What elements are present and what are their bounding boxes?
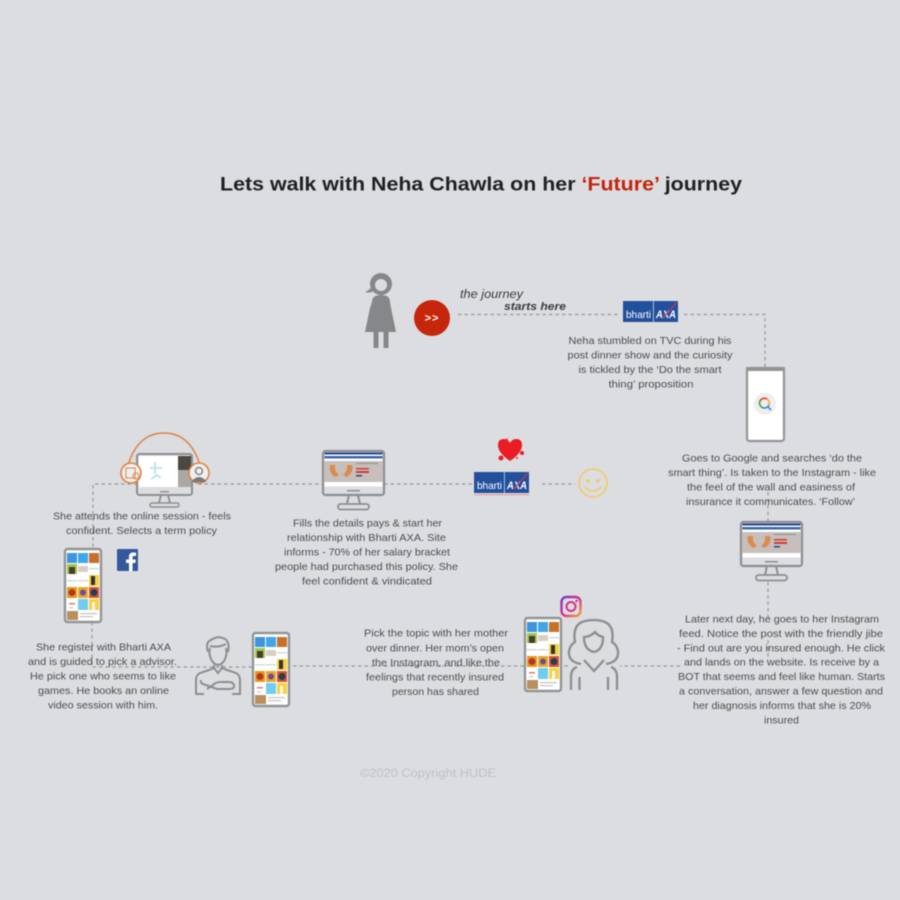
text: Pick the topic: feelings that recently insured [366, 672, 504, 684]
icon: Facebook logo [117, 549, 138, 571]
text: She register: and is guided to pick a advisor. [28, 657, 177, 668]
icon: phone with Instagram feed [525, 618, 561, 691]
text: Fills the details: Fills the details pays & start her [293, 518, 443, 530]
label: the journey starts here: the journey [460, 289, 524, 301]
text: Fills the details: feel confident & vindicated [302, 576, 432, 588]
text: Fills the details: people had purchased this policy. She [275, 562, 458, 573]
text: Goes to Google [668, 454, 876, 508]
text: Neha stumbled on TVC: Neha stumbled on TVC during his [568, 336, 732, 347]
text: Later next day: insured [764, 716, 799, 726]
text: She attends: confident. Selects a term policy [66, 526, 218, 537]
text: Goes to Google: the feel of the wall and easiness of [687, 482, 855, 494]
icon: advisor man [196, 637, 240, 694]
text: Later next day: and lands on the website. Is receive by a [684, 658, 879, 668]
text: Pick the topic: person has shared [392, 687, 479, 698]
text: She register: She register with Bharti AXA [36, 642, 171, 654]
icon: phone with Google search [746, 367, 785, 441]
text: Pick the topic: Pick the topic with her mother [364, 628, 509, 640]
text: Pick the topic: over dinner. Her mom’s open [366, 644, 504, 654]
text: She attends [53, 512, 231, 537]
text: Pick the topic [364, 628, 509, 698]
text: Fills the details: informs - 70% of her salary bracket [284, 548, 450, 558]
title: Lets walk with Neha Chawla on her ‘Future’ journey [220, 174, 742, 196]
icon: desktop monitor website [741, 522, 802, 580]
text: Later next day: feed. Notice the post with the friendly jibe [679, 629, 883, 640]
icon: Instagram logo [562, 597, 580, 616]
icon: start arrow button: >> [425, 312, 439, 324]
text: Neha stumbled on TVC: thing’ proposition [608, 380, 694, 390]
journey connector lines [92, 314, 768, 667]
text: Neha stumbled on TVC: post dinner show and the curiosity [568, 350, 733, 362]
text: Goes to Google: insurance it communicates. ‘Follow’ [686, 497, 855, 508]
copyright: ©2020 Copyright HUDE [360, 768, 496, 780]
text: Later next day: her diagnosis informs that she is 20% [693, 701, 871, 712]
text: She register: He pick one who seems to like [30, 672, 176, 682]
text: Fills the details: relationship with Bharti AXA. Site [287, 533, 446, 544]
icon: desktop monitor purchase [323, 451, 384, 510]
text: Neha stumbled on TVC [568, 336, 733, 390]
text: Later next day: a conversation, answer a few question and [679, 686, 883, 698]
text: She register: video session with him. [48, 700, 158, 712]
logo: Bharti AXA top [623, 301, 678, 322]
logo: Bharti AXA lower [474, 472, 529, 496]
icon: phone Facebook feed [65, 549, 101, 622]
icon: online video session monitor with headset [121, 433, 209, 507]
icon: red heart [498, 438, 524, 461]
icon: mother figure [569, 620, 618, 690]
icon: phone advisor listing [253, 633, 289, 706]
text: Later next day: Later next day, he goes to her Instagram [685, 614, 879, 626]
text: She attends: She attends the online session - feels [53, 512, 231, 522]
text: Neha stumbled on TVC: is tickled by the ‘Do the smart [578, 365, 722, 376]
icon: smiley face [579, 469, 607, 497]
text: Later next day [677, 614, 886, 726]
text: Pick the topic: the Instagram, and like the [372, 658, 500, 669]
text: Later next day: - Find out are you insured enough. He click [677, 644, 886, 654]
label: the journey starts here [460, 289, 566, 313]
label: the journey starts here: starts here [504, 301, 566, 313]
text: She register: games. He books an online [38, 686, 169, 697]
text: Goes to Google: Goes to Google and searches ‘do the [682, 454, 862, 464]
text: Fills the details [275, 518, 458, 588]
icon: start arrow button [414, 300, 450, 336]
text: She register [28, 642, 177, 712]
text: Goes to Google: smart thing’. Is taken to the Instagram - like [668, 468, 876, 479]
text: Later next day: BOT that seems and feel like human. Starts [678, 672, 885, 683]
icon: woman figure [365, 273, 396, 348]
